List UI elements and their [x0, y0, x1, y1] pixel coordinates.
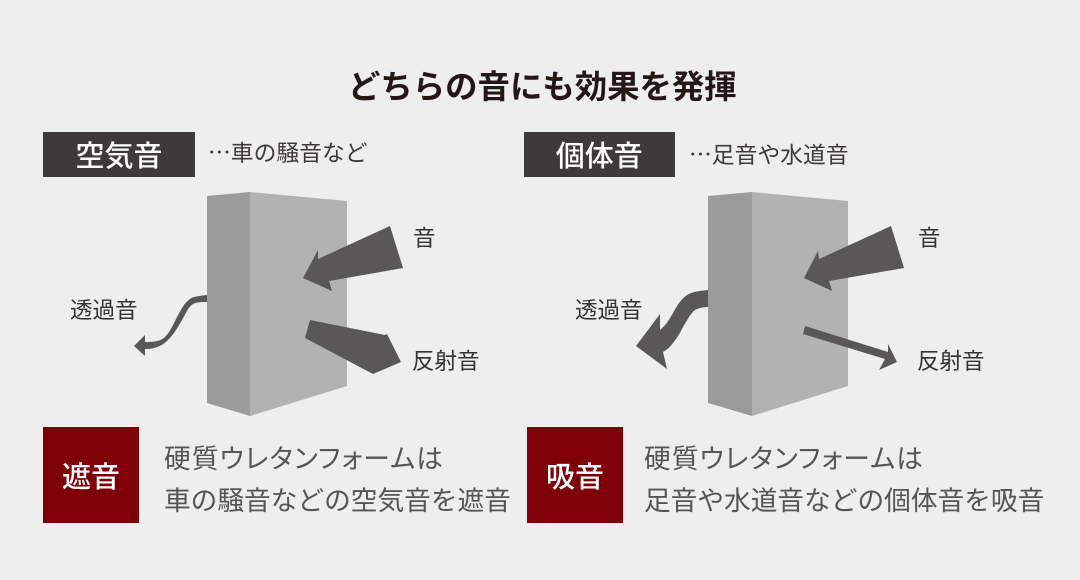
wall front — [752, 192, 848, 416]
text: airborne sound examples: ⋯車の騒音など — [208, 135, 368, 168]
text: sound insulation description: 車の騒音などの空気音を遮音 — [164, 486, 511, 516]
arrow: incoming sound — [303, 226, 403, 291]
wall front — [250, 192, 347, 416]
heading: solid-borne sound: 個体音 — [556, 140, 643, 172]
text: sound insulation description: 硬質ウレタンフォームは — [164, 444, 444, 474]
text: sound absorption description: 硬質ウレタンフォームは — [644, 444, 924, 474]
arrow: reflected sound — [305, 320, 401, 374]
arrow: incoming sound — [804, 226, 904, 291]
text: solid-borne sound examples: ⋯足音や水道音 — [689, 137, 849, 170]
label: sound: 音 — [413, 226, 436, 251]
title: どちらの音にも効果を発揮 — [348, 69, 737, 105]
text: sound absorption description — [644, 444, 1044, 516]
arrow: transmitted sound — [636, 290, 708, 369]
text: sound insulation description — [164, 444, 511, 516]
badge: sound insulation: 遮音 — [62, 462, 120, 494]
arrow: transmitted sound — [134, 295, 207, 356]
badge: sound absorption — [527, 427, 623, 523]
text: sound absorption description: 足音や水道音などの個体音を吸音 — [644, 486, 1044, 516]
badge: sound absorption: 吸音 — [546, 462, 604, 494]
badge: sound insulation — [43, 427, 139, 523]
wall left side — [207, 192, 250, 416]
label: reflected sound: 反射音 — [917, 349, 985, 374]
label: transmitted sound: 透過音 — [575, 298, 643, 323]
heading: airborne sound — [43, 132, 195, 177]
heading: solid-borne sound — [524, 132, 675, 177]
heading: airborne sound: 空気音 — [75, 140, 162, 172]
wall left side — [708, 192, 752, 416]
label: reflected sound: 反射音 — [412, 349, 480, 374]
arrow: reflected sound — [803, 326, 897, 370]
label: sound: 音 — [918, 226, 941, 251]
label: transmitted sound: 透過音 — [70, 298, 138, 323]
